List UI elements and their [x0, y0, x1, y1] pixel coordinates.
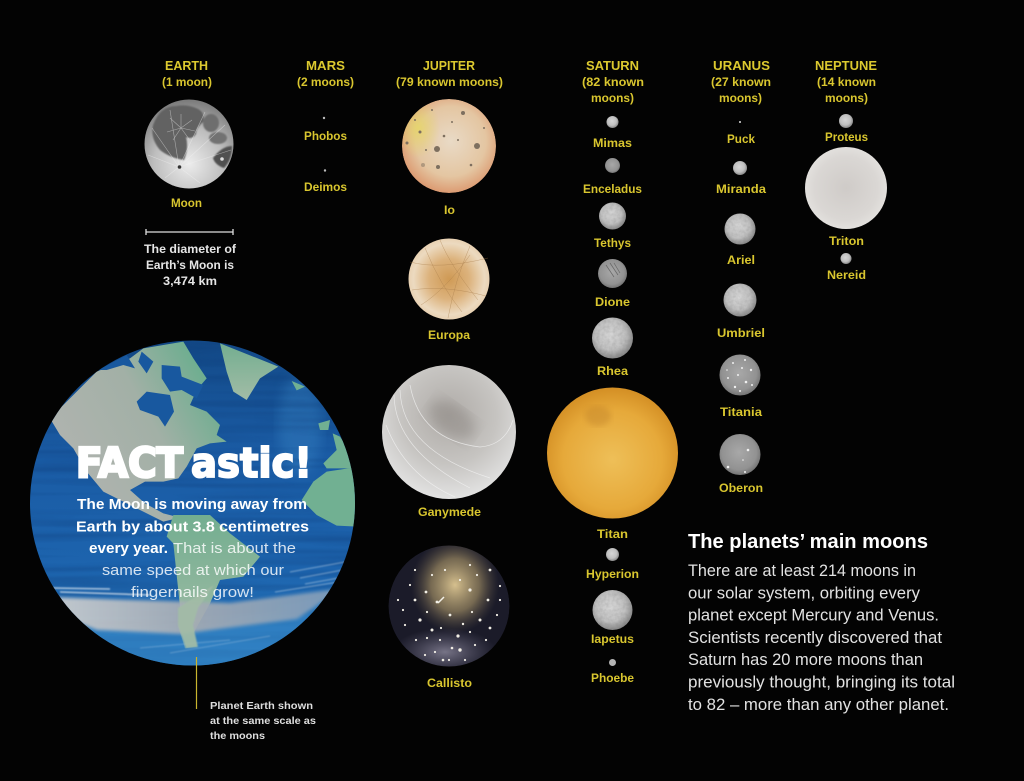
heading: Earth	[162, 58, 212, 89]
body paragraph	[688, 562, 955, 714]
moon: Oberon: Oberon	[719, 481, 763, 495]
text: diameter note	[144, 242, 237, 288]
heading: Mars	[297, 58, 354, 89]
moon: Proteus	[825, 114, 868, 144]
text: fact: every year.	[89, 540, 168, 557]
moon: Triton: Triton	[829, 234, 864, 248]
moon: Earth's Moon: Moon	[171, 196, 202, 210]
heading: Jupiter: JUPITER	[423, 58, 476, 73]
panel: FACTastic Earth globe	[30, 340, 360, 742]
moon: Nereid: Nereid	[827, 268, 866, 282]
moon: Callisto: Callisto	[427, 676, 472, 690]
body paragraph: Saturn has 20 more moons than	[688, 651, 923, 669]
moon: Puck	[727, 121, 755, 146]
moon: Hyperion	[586, 548, 639, 581]
column: Uranus	[711, 58, 771, 495]
body paragraph: Scientists recently discovered that	[688, 629, 942, 647]
moon: Ganymede: Ganymede	[418, 505, 481, 519]
leader line	[196, 657, 198, 709]
caption: Earth scale	[210, 700, 316, 742]
body paragraph: previously thought, bringing its total	[688, 674, 955, 692]
continents	[50, 342, 360, 648]
heading: Uranus: moons)	[719, 91, 762, 105]
heading: The planets’ main moons	[688, 531, 928, 553]
heading: Uranus: (27 known	[711, 75, 771, 89]
text: fact: same speed at which our	[102, 562, 284, 579]
heading: FACTastic!: FACT	[76, 439, 183, 487]
caption: Earth scale: the moons	[210, 730, 265, 742]
heading: Earth: (1 moon)	[162, 75, 212, 89]
heading: Uranus	[711, 58, 771, 105]
moon: Io	[396, 98, 496, 217]
moon: Iapetus: Iapetus	[591, 632, 634, 646]
heading: Jupiter	[396, 58, 503, 89]
column: Saturn	[547, 58, 678, 685]
moon: Tethys: Tethys	[594, 236, 631, 250]
caption: Earth scale: Planet Earth shown	[210, 700, 313, 712]
heading: Saturn: moons)	[591, 91, 634, 105]
caption: Earth scale: at the same scale as	[210, 715, 316, 727]
moon: Rhea: Rhea	[597, 364, 628, 378]
moon: Mimas	[593, 116, 632, 150]
text: diameter note: 3,474 km	[163, 274, 217, 288]
moon: Proteus: Proteus	[825, 130, 868, 144]
moon: Titan	[547, 388, 678, 541]
heading: Neptune: (14 known	[817, 75, 876, 89]
heading: Jupiter: (79 known moons)	[396, 75, 503, 89]
moon: Titania: Titania	[720, 405, 762, 419]
heading: FACTastic!	[76, 439, 312, 487]
moon: Miranda: Miranda	[716, 182, 766, 196]
column: Mars	[297, 58, 354, 194]
column: Earth	[144, 58, 237, 288]
moon: Europa: Europa	[428, 328, 470, 342]
moon: Titania	[720, 354, 762, 419]
moon: Enceladus: Enceladus	[583, 182, 642, 196]
moon: Mimas: Mimas	[593, 136, 632, 150]
moon: Io: Io	[444, 203, 455, 217]
heading: Mars: (2 moons)	[297, 75, 354, 89]
moon: Miranda	[716, 161, 766, 196]
moon: Tethys	[594, 202, 631, 250]
moon: Deimos: Deimos	[304, 180, 347, 194]
body paragraph: There are at least 214 moons in	[688, 562, 916, 580]
text: diameter note: Earth’s Moon is	[146, 258, 234, 272]
moon: Phobos: Phobos	[304, 129, 347, 143]
moon: Enceladus	[583, 158, 642, 196]
heading: Saturn	[582, 58, 644, 105]
moon: Titan: Titan	[597, 527, 628, 541]
South America tip over clouds	[178, 585, 214, 648]
text: fact: fingernails grow!	[131, 584, 254, 601]
heading: Saturn: (82 known	[582, 75, 644, 89]
moon: Nereid	[827, 253, 866, 282]
text block: the planets' main moons	[688, 531, 955, 714]
moon: Ariel: Ariel	[727, 253, 755, 267]
text: fact	[76, 496, 309, 601]
text: fact: The Moon is moving away from	[77, 496, 307, 513]
moon: Rhea	[592, 318, 633, 378]
heading: Uranus: URANUS	[713, 58, 770, 73]
heading: Mars: MARS	[306, 58, 345, 73]
moon: Oberon	[719, 434, 763, 495]
moon: Dione	[595, 259, 630, 309]
heading: Saturn: SATURN	[586, 58, 639, 73]
text: fact: Earth by about 3.8 centimetres	[76, 518, 309, 536]
moon: Earth's Moon	[144, 100, 234, 210]
text: fact: That is about the	[173, 540, 296, 557]
moon: Phoebe	[591, 659, 634, 685]
column: Neptune	[805, 58, 887, 282]
heading: Neptune: NEPTUNE	[815, 58, 877, 73]
moon: Dione: Dione	[595, 295, 630, 309]
moon: Triton	[805, 147, 887, 248]
column: Jupiter	[382, 58, 516, 690]
moon: Ganymede	[382, 365, 516, 519]
lower ocean	[82, 598, 324, 666]
scale bar	[146, 229, 233, 235]
moon: Iapetus	[591, 590, 634, 646]
globe: planet Earth	[30, 340, 360, 667]
moon: Europa	[408, 238, 490, 342]
moon: Hyperion: Hyperion	[586, 567, 639, 581]
moon: Umbriel: Umbriel	[717, 326, 765, 340]
moon: Phoebe: Phoebe	[591, 671, 634, 685]
moon: Ariel	[724, 214, 756, 267]
moon: Umbriel	[717, 284, 765, 340]
text: diameter note: The diameter of	[144, 242, 237, 256]
heading: Neptune: moons)	[825, 91, 868, 105]
heading: Neptune	[815, 58, 877, 105]
body paragraph: to 82 – more than any other planet.	[688, 696, 949, 714]
body paragraph: our solar system, orbiting every	[688, 584, 921, 602]
moon: Callisto	[388, 537, 510, 690]
cloud bands	[50, 588, 345, 634]
heading: FACTastic!: astic!	[191, 439, 312, 487]
heading: Earth: EARTH	[165, 58, 208, 73]
moon: Puck: Puck	[727, 132, 755, 146]
body paragraph: planet except Mercury and Venus.	[688, 607, 939, 625]
